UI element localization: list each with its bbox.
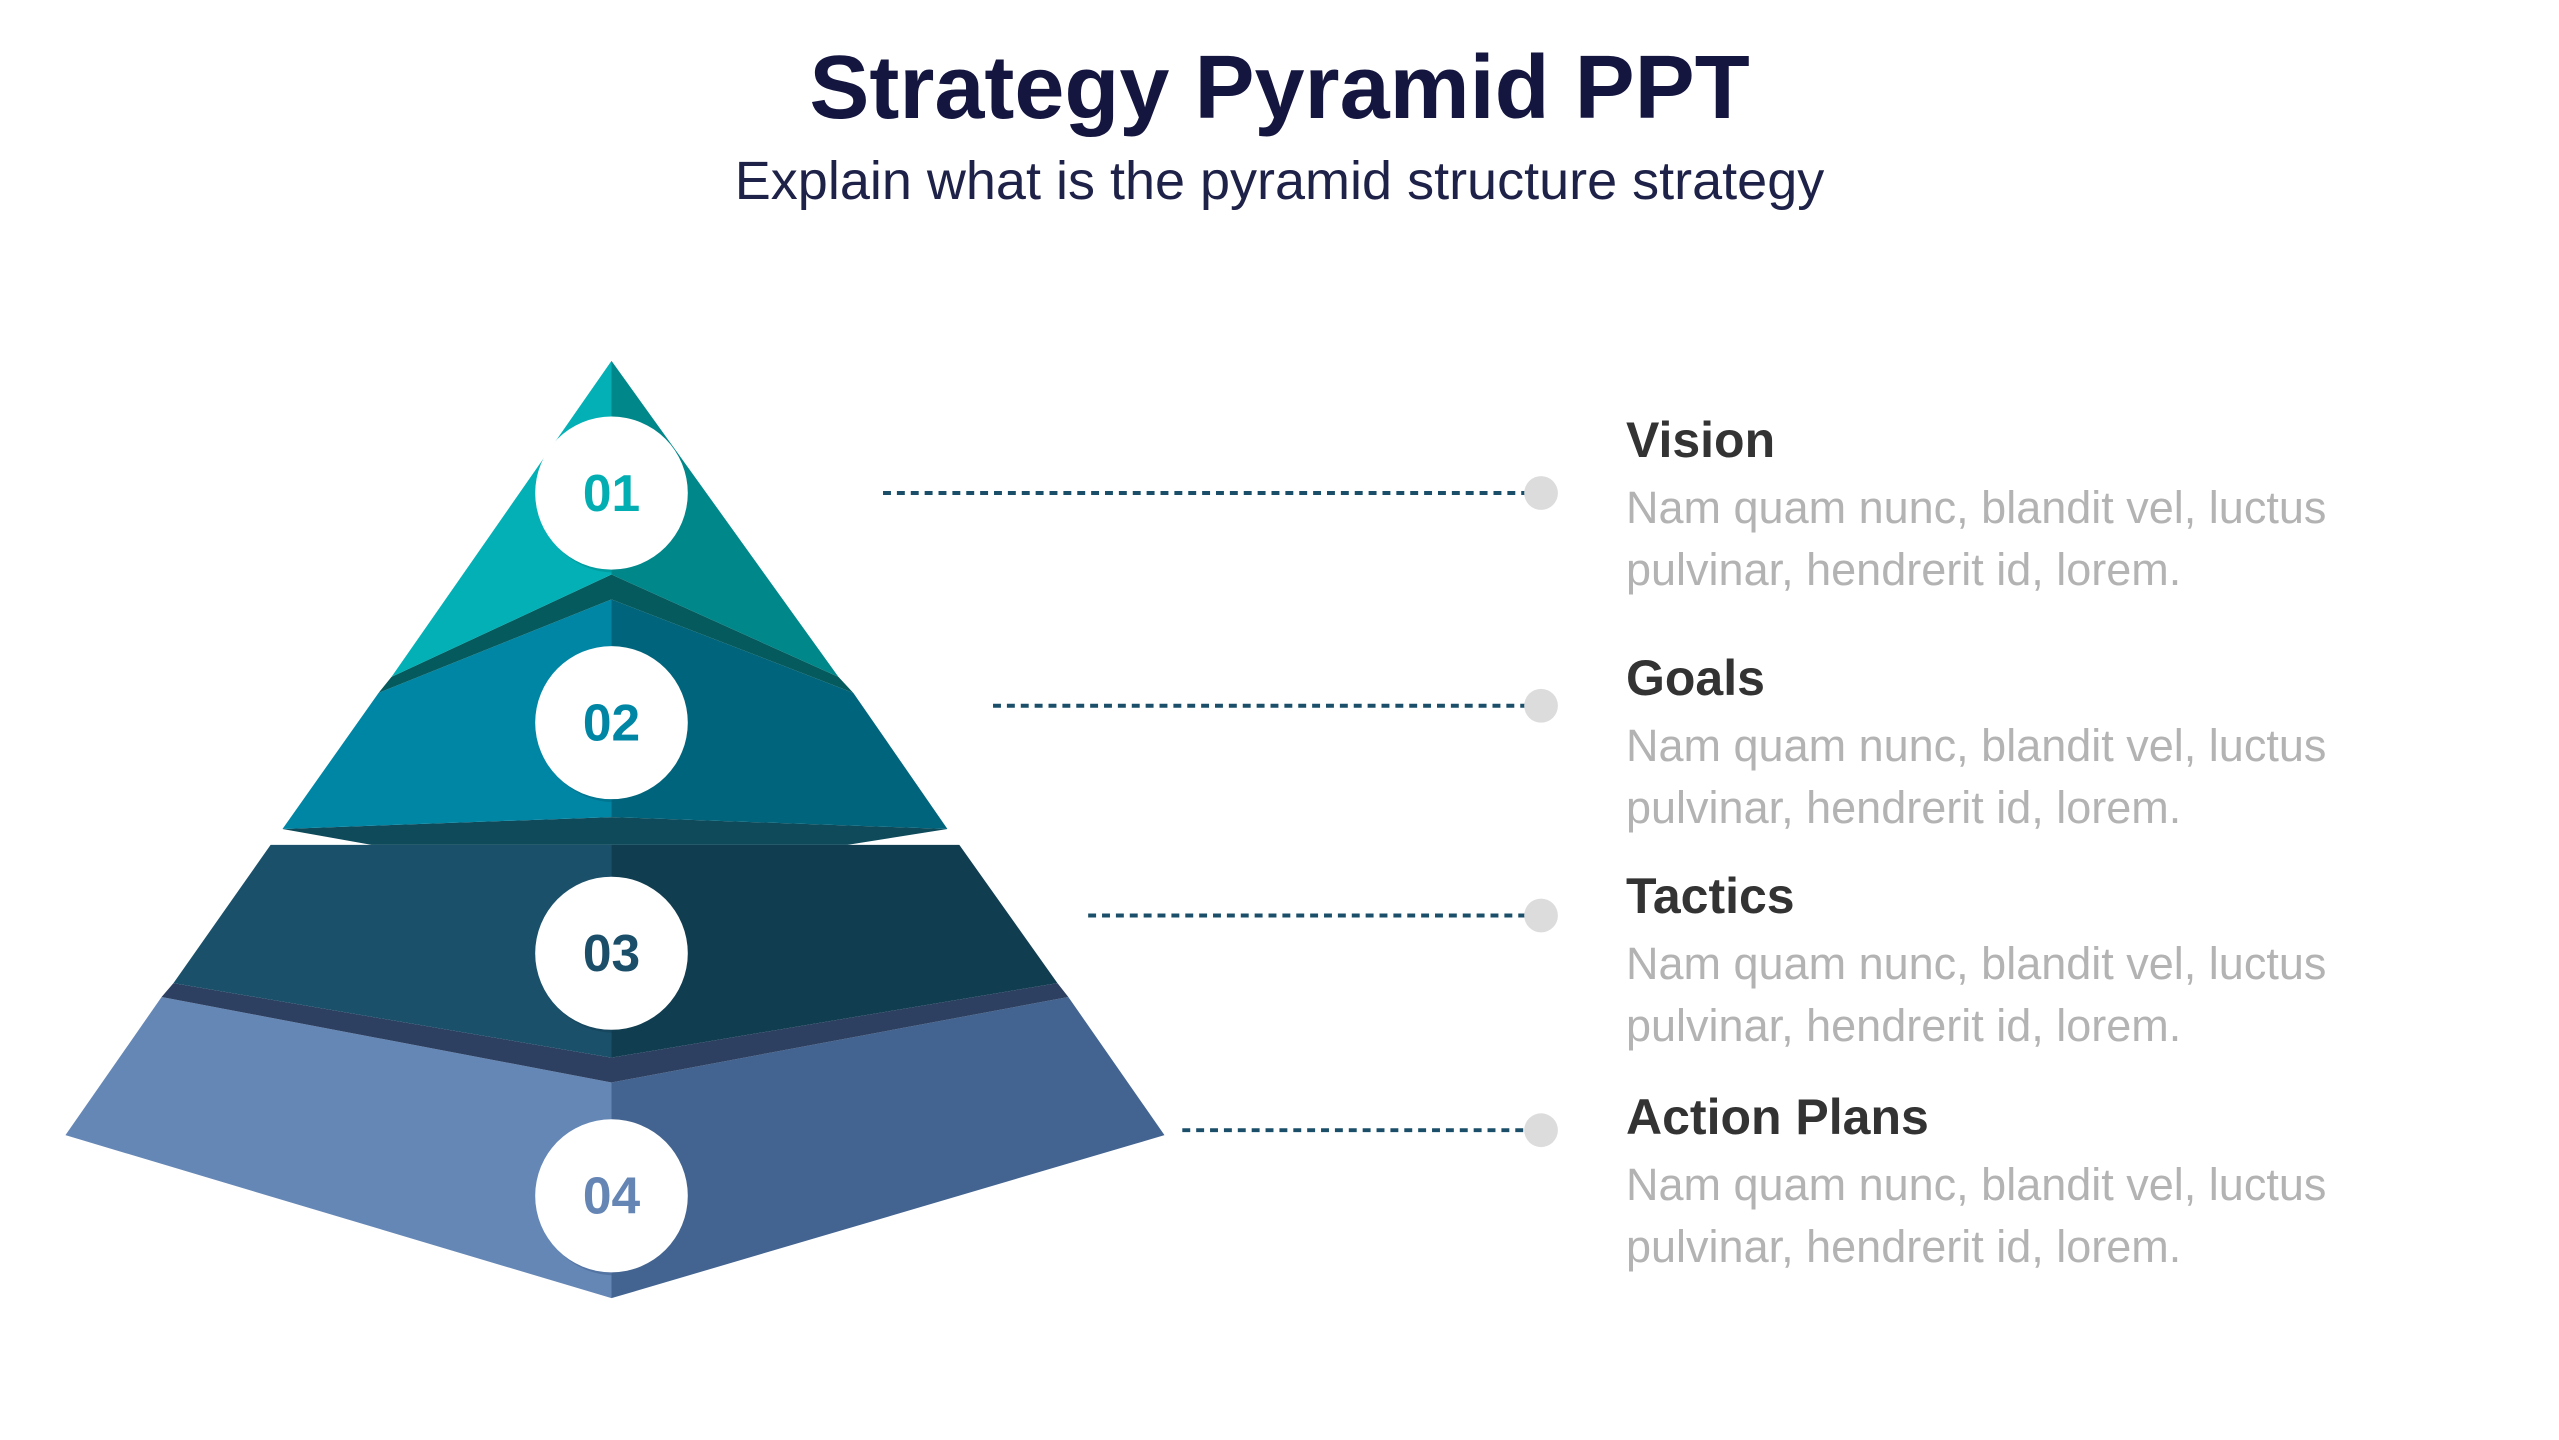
text block: Tactics [1626,868,2326,1051]
subtitle: Explain what is the pyramid structure strategy [735,151,1824,211]
tier 1 [391,361,838,677]
circle 03: 03 [583,924,640,982]
circle 02: 02 [583,693,640,752]
text block: Goals: Goals [1626,650,1765,706]
text block: Tactics: pulvinar, hendrerit id, lorem. [1626,1000,2181,1051]
circle 03 [535,877,691,1033]
title: Strategy Pyramid PPT [809,38,1750,138]
text block: Goals: pulvinar, hendrerit id, lorem. [1626,782,2181,833]
text block: Tactics: Nam quam nunc, blandit vel, luctus [1626,938,2326,989]
text block: Vision [1626,412,2326,595]
tier 3 [173,817,1057,1058]
text block: Action Plans [1626,1089,2326,1272]
text block: Goals: Nam quam nunc, blandit vel, luctus [1626,720,2326,771]
circle 04 [535,1119,691,1275]
tier 4 [65,983,1164,1298]
connector 4 [1182,1113,1558,1147]
connector 3 [1088,899,1558,932]
circle 04: 04 [583,1167,640,1225]
connector 2 [993,689,1558,723]
text block: Tactics: Tactics [1626,868,1795,924]
circle 01: 01 [583,464,640,522]
text block: Action Plans: pulvinar, hendrerit id, lorem. [1626,1221,2181,1272]
text block: Vision: pulvinar, hendrerit id, lorem. [1626,544,2181,595]
text block: Action Plans: Nam quam nunc, blandit vel, luctus [1626,1159,2326,1210]
circle 01 [535,416,691,573]
connector 1 [883,476,1558,510]
text block: Goals [1626,650,2326,833]
tier 2 [282,575,947,829]
text block: Vision: Nam quam nunc, blandit vel, luctus [1626,482,2326,533]
text block: Action Plans: Action Plans [1626,1089,1929,1145]
text block: Vision: Vision [1626,412,1775,468]
circle 02 [535,646,691,802]
